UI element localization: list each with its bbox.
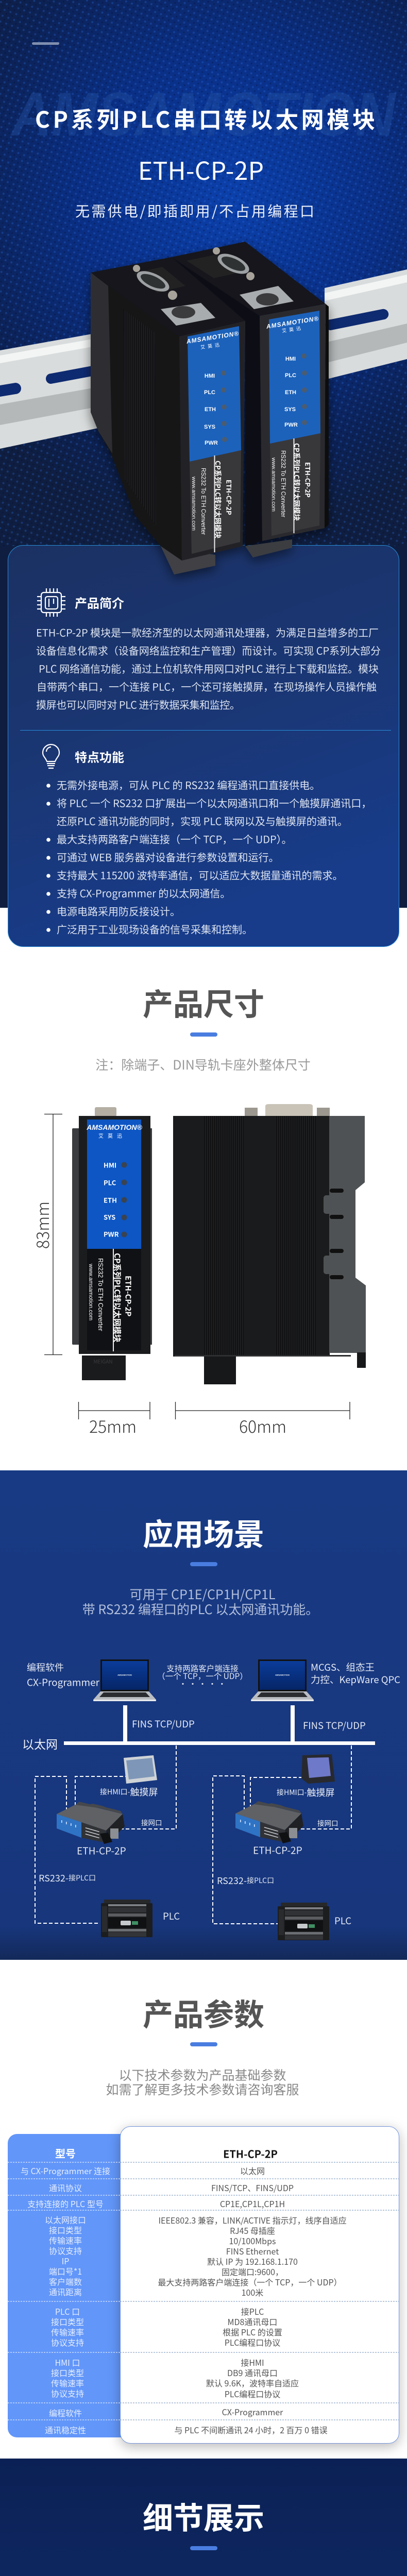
front view of module: www.amsamotion.com — [88, 1263, 94, 1320]
features list: 无需外接电源，可从 PLC 的 RS232 编程通讯口直接供电。 — [57, 777, 320, 792]
RS232 labels: RS232-接PLC口 — [39, 1871, 96, 1885]
decorative pill — [32, 42, 59, 45]
intro paragraph: 摸屏也可以同时对 PLC 进行数据采集和监控。 — [36, 697, 240, 712]
left module: PWR — [205, 440, 218, 446]
left module — [91, 257, 245, 574]
icon: chip — [37, 588, 65, 617]
header row: 型号 — [55, 2145, 76, 2161]
row: HMI port: 协议支持 — [51, 2387, 84, 2399]
intro paragraph — [36, 624, 381, 712]
row: HMI port: 接HMI — [241, 2356, 264, 2368]
right module: SYS — [284, 406, 296, 413]
row: ethernet: 固定端口:9600， — [222, 2265, 283, 2278]
row: PLC port — [51, 2305, 282, 2348]
panel: product intro and features — [8, 545, 399, 947]
row: ethernet: 最大支持两路客户端连接（一个 TCP，一个 UDP） — [158, 2276, 342, 2288]
right module: PLC — [285, 372, 296, 379]
HMI labels — [100, 1785, 335, 1799]
dimension: width 25mm: 25mm — [89, 1414, 137, 1438]
row: PLC models — [27, 2197, 285, 2210]
row: protocol — [49, 2181, 294, 2194]
row: PLC models: 支持连接的 PLC 型号 — [27, 2197, 104, 2210]
right module: ETH — [285, 389, 296, 396]
right module: PWR — [284, 422, 298, 428]
front view of module: PLC — [104, 1178, 116, 1187]
intro paragraph: ETH-CP-2P 模块是一款经济型的以太网通讯处理器，为满足日益增多的工厂 — [36, 624, 379, 640]
right module: HMI — [285, 356, 296, 362]
table left column — [8, 2134, 124, 2437]
panel divider — [20, 730, 391, 731]
row: ethernet: IEEE802.3 兼容，LINK/ACTIVE 指示灯，线序自适应 — [158, 2214, 347, 2226]
two-client support note: 支持两路客户端连接 — [166, 1663, 239, 1674]
row: ethernet — [45, 2213, 347, 2298]
hero background — [0, 0, 407, 908]
row: stability: 与 PLC 不间断通讯 24 小时，2 百万 0 错误 — [174, 2424, 328, 2436]
row: PLC port: 接PLC — [241, 2305, 264, 2317]
protocol labels — [132, 1717, 366, 1732]
front view of module: CP系列PLC转以太网模块 — [112, 1253, 123, 1343]
SCADA software label — [311, 1660, 400, 1686]
PLC labels — [163, 1909, 351, 1927]
parameters note: 如需了解更多技术参数请咨询客服 — [106, 2080, 299, 2098]
table right card — [121, 2127, 399, 2443]
two-client support note: （一个 TCP，一个 UDP） — [157, 1670, 248, 1682]
protocol labels: FINS TCP/UDP — [303, 1719, 366, 1732]
row: HMI port: 默认 9.6K，波特率自适应 — [206, 2377, 299, 2389]
left module: CP系列PLC转以太网模块 — [213, 461, 224, 539]
ethernet label: 以太网 — [22, 1735, 58, 1752]
intro paragraph: 自带两个串口，一个连接 PLC，一个还可接触摸屏，在现场操作人员操作触 — [37, 679, 377, 693]
module labels: ETH-CP-2P — [253, 1843, 302, 1857]
row: HMI port: PLC编程口协议 — [225, 2387, 280, 2400]
features list: 支持最大 115200 波特率通信，可以适应大数据量通讯的需求。 — [57, 868, 343, 882]
right module — [172, 242, 329, 557]
row: protocol: FINS/TCP、FINS/UDP — [211, 2181, 294, 2194]
row: HMI port: DB9 通讯母口 — [227, 2366, 278, 2379]
title underline — [190, 2042, 217, 2046]
protocol labels: FINS TCP/UDP — [132, 1717, 195, 1731]
left module: ETH-CP-2P — [225, 480, 234, 515]
two-client support note: · · · · · — [179, 1678, 226, 1689]
row: PLC port: PLC 口 — [55, 2305, 80, 2317]
row: ethernet: RJ45 母插座 — [230, 2224, 275, 2236]
row dividers — [8, 2162, 399, 2420]
features list: 最大支持两路客户端连接（一个 TCP，一个 UDP）。 — [57, 832, 292, 846]
front view of module: ETH-CP-2P — [123, 1276, 134, 1316]
heading: features: 特点功能 — [75, 747, 124, 766]
SCADA software label: MCGS、组态王 — [311, 1660, 375, 1674]
right module: AMSAMOTION® — [265, 315, 319, 330]
row: PLC port: PLC编程口协议 — [225, 2336, 280, 2348]
row: protocol: 通讯协议 — [49, 2181, 82, 2194]
model name: ETH-CP-2P — [138, 151, 264, 187]
module labels — [77, 1843, 302, 1858]
row: PLC port: MD8通讯母口 — [228, 2315, 277, 2328]
row: ethernet: 协议支持 — [49, 2244, 82, 2257]
row: connection — [21, 2164, 265, 2177]
laptop left — [93, 1659, 156, 1701]
row: HMI port: HMI 口 — [55, 2356, 80, 2368]
PLC labels: PLC — [334, 1914, 351, 1927]
laptop right — [251, 1659, 314, 1701]
header row — [55, 2145, 278, 2161]
right module: ETH-CP-2P — [303, 462, 313, 498]
HMI labels: 接HMI口-触摸屏 — [277, 1786, 335, 1799]
row: stability: 通讯稳定性 — [45, 2424, 86, 2436]
front view of module: HMI — [104, 1160, 116, 1170]
row: PLC port: 协议支持 — [51, 2336, 84, 2348]
front view of module — [72, 1107, 152, 1380]
row: software — [49, 2405, 283, 2419]
programming software label: 编程软件 — [27, 1660, 64, 1674]
row: ethernet: 端口号*1 — [49, 2265, 82, 2277]
DIN rail — [0, 269, 407, 449]
front view of module: RS232 To ETH Converter — [97, 1258, 104, 1331]
dashed links left — [35, 1745, 176, 1923]
icon: light bulb — [43, 744, 59, 768]
features list — [46, 777, 371, 937]
ethernet bus and risers — [64, 1705, 375, 1745]
row: ethernet: 接口类型 — [49, 2224, 82, 2236]
dimensions note: 注：除端子、DIN导轨卡座外整体尺寸 — [95, 1055, 311, 1074]
features list: 还原PLC 通讯功能的同时，实现 PLC 联网以及与触摸屏的通讯。 — [57, 813, 348, 828]
front view of module: PWR — [104, 1229, 119, 1239]
left module: RS232 To ETH Converter — [200, 468, 206, 535]
left module: ETH — [205, 406, 216, 413]
RS232 labels — [39, 1871, 274, 1887]
section title: parameters: 产品参数 — [143, 1991, 264, 2034]
network port labels — [141, 1817, 338, 1828]
row: ethernet: 客户端数 — [49, 2275, 82, 2287]
subtitle: 无需供电/即插即用/不占用编程口 — [75, 200, 314, 221]
right module: CP系列PLC转以太网模块 — [292, 443, 302, 521]
front view of module: ETH — [104, 1195, 117, 1205]
features list: 电源电路采用防反接设计。 — [57, 904, 180, 918]
row: connection: 与 CX-Programmer 连接 — [21, 2164, 110, 2177]
parameter table — [8, 2127, 399, 2443]
row: software: CX-Programmer — [222, 2405, 283, 2418]
application description: 可用于 CP1E/CP1H/CP1L — [129, 1585, 276, 1603]
row: HMI port: 传输速率 — [51, 2377, 84, 2389]
HMI right — [301, 1754, 335, 1784]
features list: 广泛用于工业现场设备的信号采集和控制。 — [57, 921, 252, 937]
dimension: width 25mm — [78, 1402, 150, 1438]
HMI left — [124, 1755, 157, 1784]
section title: dimensions: 产品尺寸 — [143, 980, 264, 1024]
programming software label — [27, 1660, 100, 1689]
intro paragraph: PLC 网络通信功能，通过上位机软件用网口对PLC 进行上下载和监控。模块 — [39, 660, 379, 676]
dimension: height 83mm — [30, 1114, 62, 1355]
title underline — [190, 2546, 217, 2550]
row: stability — [45, 2424, 328, 2436]
application description — [82, 1585, 318, 1618]
module icon left — [57, 1802, 125, 1844]
row: ethernet: 10/100Mbps — [229, 2234, 276, 2247]
row: ethernet: FINS Ethernet — [226, 2245, 279, 2257]
row: PLC port: 根据 PLC 的设置 — [223, 2326, 282, 2338]
programming software label: CX-Programmer — [27, 1675, 100, 1689]
right module: RS232 To ETH Converter — [280, 450, 286, 517]
section title: application: 应用场景 — [143, 1511, 264, 1554]
dimension: depth 60mm — [175, 1402, 350, 1438]
intro paragraph: 设备信息化需求（设备网络监控和生产管理）而设计。可实现 CP系列大部分 — [36, 643, 381, 657]
features list: 将 PLC 一个 RS232 口扩展出一个以太网通讯口和一个触摸屏通讯口， — [57, 795, 371, 810]
two-client support note — [157, 1663, 248, 1689]
row: software: 编程软件 — [49, 2406, 82, 2419]
row: connection: 以太网 — [240, 2164, 265, 2177]
left module: HMI — [205, 373, 215, 379]
row: PLC port: 传输速率 — [51, 2326, 84, 2338]
heading: intro: 产品简介 — [75, 594, 124, 611]
HMI labels: 接HMI口-触摸屏 — [100, 1785, 158, 1799]
title: CP系列PLC串口转以太网模块 — [35, 101, 375, 134]
module icon right — [235, 1801, 303, 1843]
PLC labels: PLC — [163, 1909, 180, 1923]
network port labels: 接网口 — [141, 1817, 162, 1827]
front view of module: AMSAMOTION® — [86, 1123, 142, 1131]
PLC left — [101, 1900, 152, 1937]
row: ethernet: 传输速率 — [49, 2234, 82, 2246]
PLC right — [278, 1903, 329, 1940]
header row: ETH-CP-2P — [223, 2146, 278, 2161]
left module: PLC — [204, 389, 215, 396]
network diagram — [22, 1659, 400, 1940]
RS232 labels: RS232-接PLC口 — [217, 1874, 274, 1887]
dimension: height 83mm: 83mm — [30, 1201, 54, 1249]
features list: 支持 CX-Programmer 的以太网通信。 — [57, 885, 230, 901]
left module: www.amsamotion.com — [191, 476, 197, 531]
row: ethernet: 100米 — [242, 2286, 263, 2298]
row: ethernet: 默认 IP 为 192.168.1.170 — [207, 2255, 298, 2267]
side view of module — [173, 1104, 366, 1384]
row: HMI port — [51, 2356, 299, 2400]
panel: detail display — [0, 2459, 407, 2576]
laptop left: AMSAMOTION — [117, 1673, 132, 1676]
dimension: depth 60mm: 60mm — [239, 1414, 286, 1438]
front view of module: SYS — [104, 1212, 115, 1222]
SCADA software label: 力控、KepWare QPC — [311, 1673, 400, 1686]
left module: AMSAMOTION® — [185, 330, 240, 345]
title underline — [190, 1562, 217, 1566]
dashed links right — [213, 1745, 351, 1924]
panel: application scenario — [0, 1470, 407, 1960]
row: HMI port: 接口类型 — [51, 2366, 84, 2379]
left module: SYS — [204, 424, 215, 430]
row: PLC port: 接口类型 — [51, 2315, 84, 2328]
hero product: two modules — [91, 242, 329, 574]
row: ethernet: 通讯距离 — [49, 2285, 82, 2298]
parameters note: 以下技术参数为产品基础参数 — [118, 2065, 286, 2084]
title underline — [190, 1032, 217, 1037]
right module: 艾莫迅 — [281, 325, 304, 334]
section title: details: 细节展示 — [143, 2494, 264, 2538]
application description: 带 RS232 编程口的PLC 以太网通讯功能。 — [82, 1600, 318, 1618]
parameters note — [106, 2065, 299, 2098]
features list: 可通过 WEB 服务器对设备进行参数设置和运行。 — [57, 849, 279, 865]
row: ethernet: IP — [62, 2255, 69, 2267]
module labels: ETH-CP-2P — [77, 1843, 126, 1858]
laptop right: AMSAMOTION — [275, 1673, 290, 1676]
network port labels: 接网口 — [317, 1818, 338, 1828]
left module: 艾莫迅 — [200, 341, 223, 350]
front view of module: 艾莫迅 — [98, 1131, 126, 1140]
front view of module: MEIGAN — [93, 1357, 113, 1365]
row: ethernet: 以太网接口 — [45, 2213, 86, 2226]
row: PLC models: CP1E,CP1L,CP1H — [220, 2197, 285, 2210]
right module: www.amsamotion.com — [270, 457, 277, 512]
